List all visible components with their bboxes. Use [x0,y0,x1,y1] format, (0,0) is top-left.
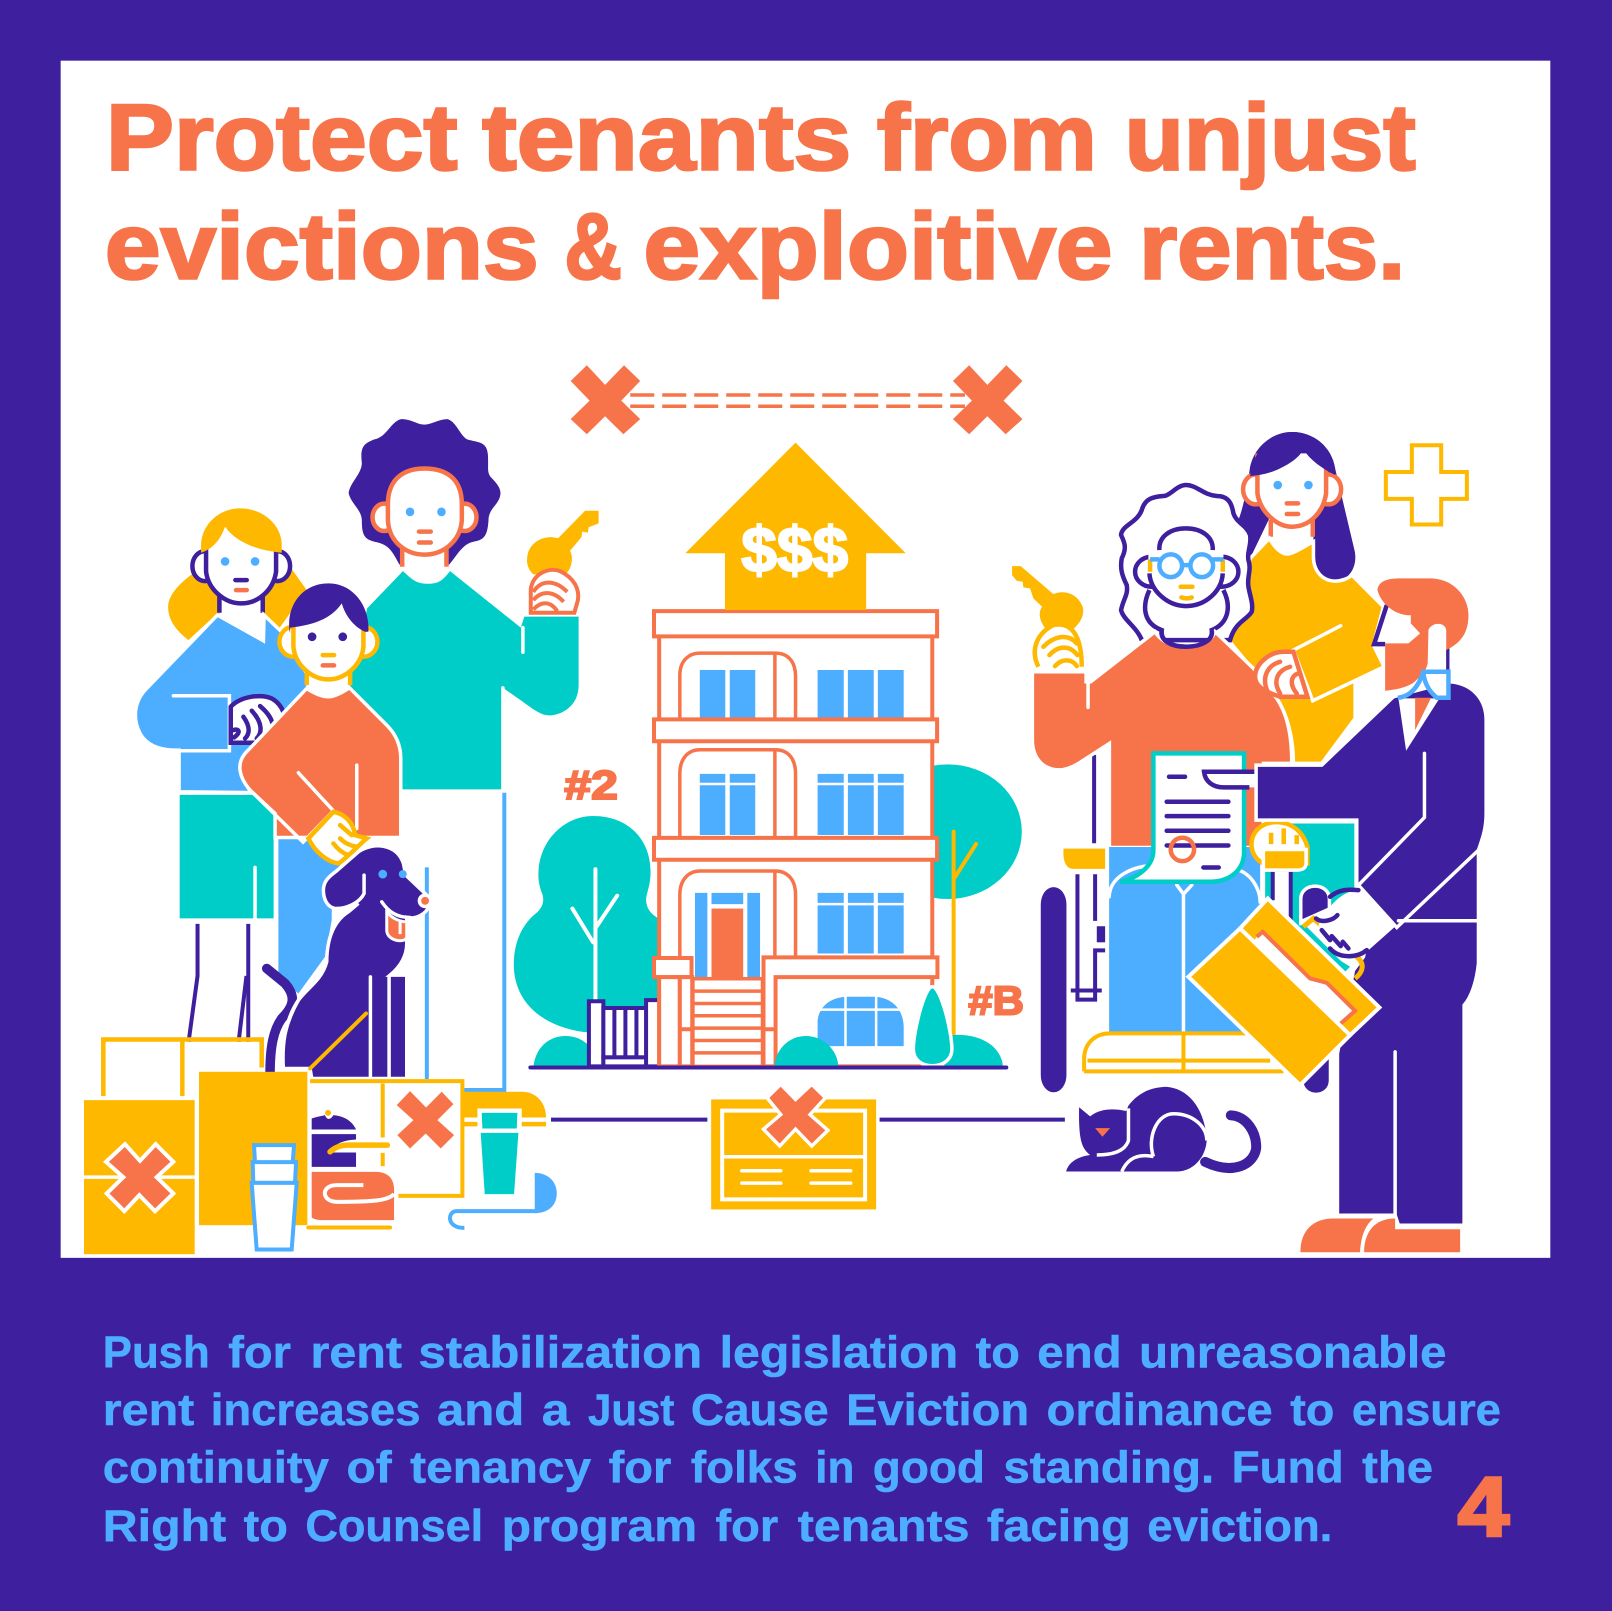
carer sleeve lines [1293,626,1384,701]
body text: a [542,1386,570,1435]
outlined box [310,1081,462,1196]
panel: white illustration card [61,61,1550,1258]
wheelchair frame block [1097,926,1105,942]
pants seams [1109,866,1260,1032]
folded blanket [312,1172,394,1220]
title: tenants [482,85,851,190]
lease document [711,1099,876,1209]
wheel right top [1301,886,1329,923]
shorts seam [253,867,257,918]
carer back hair [1238,432,1355,581]
temple ticks [1150,559,1223,572]
wheel right bottom [1303,1050,1329,1093]
boy pants [278,837,350,993]
pants seam [427,793,504,1090]
body text: for [716,1502,778,1551]
box base line [308,1226,390,1230]
shorts [180,795,274,918]
body lines [1097,1108,1207,1172]
stacked cups [252,1145,297,1250]
windows [695,670,904,977]
nose and mouth [1181,587,1192,598]
left tree branches [572,869,617,1007]
title: evictions [105,194,539,299]
body text [103,1328,1501,1551]
roof and floor bands [654,611,937,860]
neck and shirt collar [219,593,263,642]
nose [1095,1128,1110,1137]
suit seams [1358,753,1478,1215]
leg lines [282,977,389,1079]
body text: Counsel [305,1502,483,1551]
body text: good [873,1443,985,1492]
face [388,469,462,555]
document lines [1167,777,1228,867]
ears [192,551,290,581]
elderly woman hair [1121,485,1252,640]
document [1120,753,1244,882]
sweater [1032,632,1292,847]
front bush [775,1036,838,1066]
tail [267,968,292,1073]
bushes [533,1035,1003,1066]
glasses [1150,554,1223,577]
icon: medical plus [1386,445,1467,525]
bag handles [103,1039,262,1096]
carer eyes and mouth [1273,481,1313,514]
person: carer and elderly woman [1012,432,1384,847]
white gap behind hand [1300,907,1367,973]
fence [589,1000,660,1066]
body text: Push [103,1328,210,1377]
small cone bush [913,987,952,1066]
right tree trunk [954,832,976,1035]
body text: continuity [103,1443,329,1492]
eyes and mouth [406,507,446,543]
title: Protect [106,85,457,190]
person: lawyer [1256,578,1486,1252]
carer hand [1255,652,1307,697]
jawline [1149,573,1223,606]
neck line [1445,648,1449,673]
body text: rent [310,1328,402,1377]
hand holding key [531,570,578,613]
hair cap [1159,528,1213,550]
body text: Just [588,1386,675,1435]
moving box 1 [84,1100,195,1254]
body text: program [502,1502,697,1551]
carer neck lines [1271,520,1313,537]
body text: ordinance [1047,1386,1273,1435]
body text: folks [691,1443,798,1492]
beard hair lines [1145,590,1228,647]
stairs [693,979,762,1066]
tongue line [399,922,402,934]
carer ears [1243,474,1341,504]
body text: Eviction [846,1386,1029,1435]
boy hand [308,812,367,863]
carer face [1257,453,1326,527]
body text: stabilization [418,1328,702,1377]
armrest hand grip [1252,822,1307,870]
shirt [1398,698,1439,751]
pigtails [168,567,307,640]
folder back [1240,898,1379,1035]
title: & [564,194,622,299]
legs [189,924,248,1042]
body text: increases [211,1386,420,1435]
dashed double line between X marks [630,395,965,406]
price label: $$$ [741,514,848,586]
title: from [877,85,1097,190]
pants [1109,847,1260,1032]
moving box 2 [199,1072,307,1225]
ground line [530,1065,1006,1069]
title: unjust [1125,85,1416,190]
blue shade [535,1173,557,1213]
body text: Fund [1232,1443,1344,1492]
body text: eviction. [1147,1502,1332,1551]
wheel left [1041,887,1066,1092]
box divider [381,1083,385,1166]
sweater fold [173,696,229,751]
tie [1415,698,1431,730]
body text: facing [987,1502,1131,1551]
boy hair [289,583,369,633]
illustration: building and street [514,365,1065,1209]
sweater [349,571,579,789]
hand [231,696,285,743]
label: building 2: #2 [564,762,618,808]
footrest [1084,1033,1283,1071]
person: woman with afro [180,419,599,1090]
folder paper tab [1257,932,1355,1024]
body text: of [346,1443,392,1492]
body text: for [228,1328,291,1377]
eyes [378,870,407,878]
neck lines [219,595,263,613]
icon: lease X [764,1084,828,1146]
folder and lawyer hand [1188,889,1397,1085]
purple shirt [312,1115,356,1167]
body text: tenancy [410,1443,592,1492]
blue cord [450,1211,537,1228]
window bars [698,784,906,904]
lawyer hand [1316,889,1397,957]
face outline [1374,605,1387,644]
tongue [387,912,407,941]
pointing hand outline [1204,772,1255,787]
body text: unreasonable [1139,1328,1446,1377]
ears [373,504,476,531]
seat, armrest and document [1120,753,1356,1093]
mouth line [382,902,410,917]
body text: tenants [798,1502,969,1551]
wheelchair back frame [1071,755,1105,1000]
face [1148,553,1223,606]
title: exploitive [644,194,1112,299]
wheelchair frame and plus icon [1041,445,1467,1092]
body text: to [244,1502,288,1551]
right tree crown [874,764,1022,899]
body text: to [1290,1386,1334,1435]
teal cup [481,1113,518,1194]
timeline lines [551,1118,1065,1122]
body text: the [1362,1443,1433,1492]
folder paper [1250,932,1355,1030]
wheelchair strut [1273,872,1291,925]
body text: legislation [720,1328,958,1377]
boy sleeve lines [248,765,357,842]
hair and beard [1377,578,1468,691]
body text: end [1037,1328,1122,1377]
body text: to [976,1328,1020,1377]
icon: top right X [953,365,1023,434]
teal gap [1332,955,1350,972]
boy eyes and mouth [308,632,347,665]
belongings boxes [84,1039,557,1254]
body text: Cause [691,1386,829,1435]
body text: in [815,1443,854,1492]
label: building B: #B [968,978,1024,1024]
body text: rent [103,1386,195,1435]
dog [267,846,431,1079]
porch and columns [654,957,937,1066]
boy face [293,613,363,679]
sweater [135,615,310,793]
face [206,543,276,603]
title: rents. [1139,194,1405,299]
folder front [1188,928,1350,1085]
body text: and [437,1386,524,1435]
icon: outlined box X [397,1091,454,1148]
body text: for [609,1443,671,1492]
title [105,85,1416,299]
suit [1256,682,1486,1225]
carer sweater [1228,538,1384,763]
pointing hand [1204,772,1255,787]
ears [1135,557,1238,587]
tail [1205,1115,1256,1168]
boy hand and dog [267,812,431,1079]
icon: top left X [571,365,640,434]
garage window bars [817,996,905,1047]
arched balconies [680,653,796,957]
collar line [1162,631,1212,647]
rent up arrow [685,443,906,610]
ear line [340,875,364,908]
boy neck lines [307,672,350,685]
neck lines [402,548,446,567]
sweater fold [503,628,523,789]
key [1012,566,1083,630]
body text: standing. [1003,1443,1214,1492]
eyes and mouth [221,557,259,590]
nose [419,895,431,906]
page number: 4 [1458,1460,1509,1554]
collar [1398,672,1448,698]
neck [402,545,446,570]
shirt button and hanger [325,1110,387,1152]
door [712,909,743,979]
boy ears [279,627,377,657]
key [527,511,599,574]
document seal [1171,838,1194,861]
body [283,846,429,1079]
armrest left [1063,849,1105,869]
hair fringe [201,508,282,553]
boy neck [307,667,350,692]
sleeve fold [1086,682,1090,707]
ear [1427,624,1446,673]
body text: Right [103,1502,226,1551]
person: blonde woman and boy [135,508,401,842]
elderly woman pants and footrest [1084,847,1283,1071]
building walls [659,631,932,1066]
hair [349,419,500,565]
boy sweater [240,688,401,837]
person: boy pants and dog base [278,837,350,993]
yellow lamp [463,1092,546,1124]
carer fringe [1250,432,1335,476]
icon: box X [106,1144,173,1211]
hand [1035,625,1082,667]
garage arched window [818,997,904,1046]
body [1066,1087,1207,1172]
body text: ensure [1352,1386,1501,1435]
teal seat back [1263,822,1356,970]
cat [1066,1087,1256,1172]
shoes [1300,1219,1460,1252]
carer neck [1271,517,1313,550]
yellow diagonal strap [310,1013,366,1068]
folder handle [1303,918,1362,978]
left tree [514,816,665,1032]
